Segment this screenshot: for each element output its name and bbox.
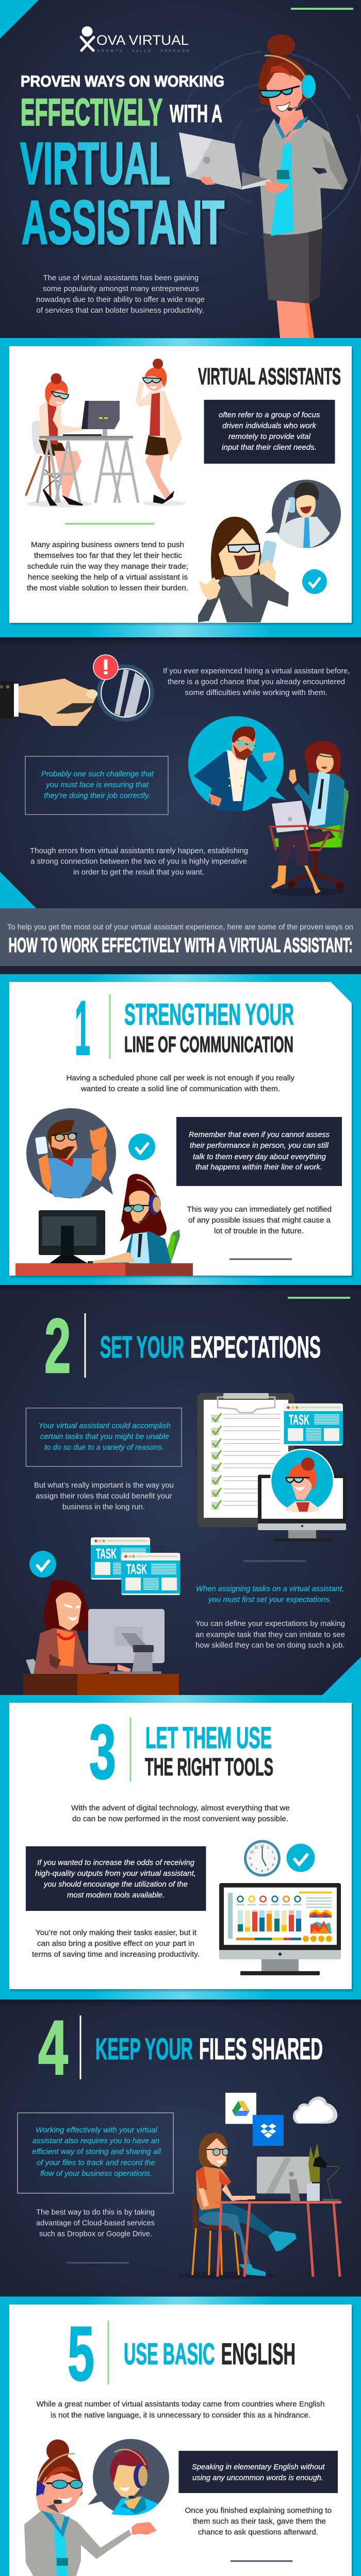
text: roles: assign their roles that could benefit your <box>36 1492 172 1500</box>
divider <box>229 1258 292 1260</box>
section shadow <box>0 1999 361 2006</box>
step number 5: 5 <box>68 2310 94 2397</box>
accent line <box>291 8 353 10</box>
text: business owners: schedule ruin the way they manage their trade; <box>27 562 188 571</box>
panel: virtual assistants section band <box>0 338 361 637</box>
callout: definition: often refer to a group of focus <box>219 411 320 419</box>
icon: clock: 6 <box>261 1870 264 1873</box>
text: errors <box>30 846 248 877</box>
title: PROVEN WAYS ON WORKING <box>21 72 224 90</box>
divider <box>67 2262 129 2264</box>
panel: step 1 band <box>0 974 361 1285</box>
illustration: assistant at computer <box>23 1580 179 1695</box>
illustration: hand with magnifier <box>0 655 154 726</box>
text: define expectations: You can define your expectations by making <box>195 1619 345 1628</box>
icon: check <box>29 1551 56 1578</box>
callout: modern tools: If you wanted to increase the odds of receiving <box>37 1858 195 1867</box>
callout: sharing: of your files to track and record the <box>37 2159 155 2167</box>
callout: remember: talk to them every day about everything <box>193 1153 326 1161</box>
icon: clock: 5 <box>267 1868 269 1872</box>
text: define expectations <box>195 1619 345 1650</box>
panel: step 1 card <box>9 982 352 1276</box>
illustration: worried woman at laptop <box>269 741 349 896</box>
panel: step 3 band <box>0 1695 361 1999</box>
text: hiring difficulties: some difficulties while working with them. <box>185 688 327 697</box>
text: define expectations: an example task that they can imitate to see <box>195 1630 345 1639</box>
callout: modern tools: most modern tools available. <box>67 1891 165 1900</box>
text: cloud services: advantage of Cloud-based services <box>36 2219 155 2228</box>
callout: tasks: to do so due to a variety of reasons. <box>44 1443 164 1452</box>
illustration: man speech bubble <box>188 716 286 811</box>
panel: difficulties background <box>0 637 361 974</box>
icon: clock: 10 <box>250 1851 254 1854</box>
panel: hero background <box>0 0 361 338</box>
text: questions <box>185 2506 332 2537</box>
icon: dropbox card <box>253 2115 284 2146</box>
icon: check <box>128 1133 155 1160</box>
callout: definition: remotely to provide vital <box>228 432 311 441</box>
callout: definition: input that their client needs. <box>222 443 317 452</box>
heading: step 2: SET YOUR <box>100 1330 184 1364</box>
divider <box>130 1718 131 1782</box>
text: phone call: wanted to create a solid line of communication with them. <box>80 1084 280 1093</box>
callout: challenge: you must face is ensuring that <box>45 781 149 789</box>
panel glow bottom <box>88 1276 273 1285</box>
text: hiring difficulties: there is a good chance that you already encountered <box>168 677 345 686</box>
text: digital technology <box>71 1804 290 1823</box>
text: roles: But what’s really important is the way you <box>34 1481 174 1490</box>
panel glow top <box>88 338 273 346</box>
text: notifications: of any possible issues that might cause a <box>188 1216 331 1225</box>
callout: elementary english: Speaking in elementary English without <box>192 2463 325 2471</box>
text: phone call <box>67 1074 294 1093</box>
rings behind character <box>176 52 361 237</box>
illustration: two assistants and desk <box>26 359 186 507</box>
title: VIRTUAL <box>20 131 170 197</box>
illustration: task cards: TASK <box>126 1561 147 1577</box>
icon: clock: 12 <box>260 1844 264 1848</box>
illustration: task card: TASK <box>289 1412 309 1428</box>
panel: white card <box>9 346 352 623</box>
text: native language: is not the native language, it is unnecessary to consider this as a hindrance. <box>51 2411 310 2419</box>
text: errors: in order to get the result that you want. <box>73 868 204 877</box>
callout: sharing: assistant also requires you to have an <box>32 2137 159 2145</box>
illustration: man on phone bubble <box>265 480 341 548</box>
text: cloud services <box>36 2208 155 2239</box>
illustration: woman on phone <box>198 517 289 622</box>
panel glow top <box>88 1695 273 1703</box>
corner triangle <box>0 0 39 39</box>
icon: check <box>287 1843 315 1872</box>
icon: clock: 9 <box>249 1857 251 1861</box>
text: positive effect: You’re not only making their tasks easier, but it <box>36 1928 197 1937</box>
callout: sharing: efficient way of storing and sharing all <box>32 2147 161 2156</box>
divider <box>231 2561 293 2562</box>
band shadow <box>0 966 361 974</box>
callout: tasks: Your virtual assistant could accomplish <box>38 1421 171 1430</box>
icon: clock: 11 <box>254 1846 258 1850</box>
illustration: woman at desk with computer <box>177 2133 341 2279</box>
callout: challenge: they’re doing their job correctly. <box>44 791 151 800</box>
panel glow top <box>88 2297 273 2304</box>
illustration: task cards <box>91 1537 180 1595</box>
section shadow <box>0 637 361 646</box>
icon: clock: 4 <box>272 1863 274 1867</box>
panel: step 4 background <box>0 1999 361 2297</box>
divider <box>85 1313 86 1378</box>
icon: google drive card <box>225 2093 256 2124</box>
title: EFFECTIVELY <box>21 92 162 133</box>
logo: OVA Virtual <box>81 26 189 53</box>
title <box>20 72 224 257</box>
text: business owners <box>27 540 188 592</box>
text: cloud services: such as Dropbox or Google Drive. <box>39 2230 152 2239</box>
text: roles <box>34 1481 174 1512</box>
callout: sharing: Working effectively with your virtual <box>36 2126 158 2134</box>
icon: clock: 8 <box>251 1863 253 1867</box>
text: cloud services: The best way to do this is by taking <box>36 2208 155 2217</box>
illustration: headset person bubble <box>88 2439 169 2515</box>
callout: sharing <box>18 2113 173 2193</box>
intro text: The use of virtual assistants has been gaining <box>43 274 199 282</box>
step number 3: 3 <box>89 1708 116 1795</box>
icon: clock: 7 <box>255 1868 257 1872</box>
text: notifications <box>187 1205 332 1235</box>
icon: cloud <box>293 2096 337 2124</box>
text: questions: chance to ask questions afterward. <box>198 2528 318 2537</box>
heading: step 1 <box>124 998 294 1057</box>
text: hiring difficulties: If you ever experienced hiring a virtual assistant before, <box>163 667 350 675</box>
illustration: analytics monitor <box>219 1883 341 1975</box>
divider <box>107 2320 109 2384</box>
callout: remember: their performance in person, you can still <box>190 1141 329 1150</box>
text: questions: them such as their task, gave them the <box>193 2517 326 2526</box>
text: 1 <box>75 985 90 1071</box>
heading: step 5: USE BASIC <box>124 2337 215 2371</box>
heading: how to work effectively <box>7 923 353 957</box>
icon: check <box>302 569 327 594</box>
intro text: some popularity amongst many entrepreneurs <box>43 284 199 293</box>
text: notifications: This way you can immediately get notified <box>187 1205 332 1214</box>
heading: step 5: ENGLISH <box>221 2337 296 2371</box>
callout: remember: that happens within their line of work. <box>195 1163 322 1172</box>
text: business owners: Many aspiring business owners tend to push <box>31 540 184 549</box>
intro text <box>36 274 205 315</box>
text: business owners: themselves too far that they let their hectic <box>34 551 182 560</box>
accent line <box>65 523 154 524</box>
text: digital technology: With the advent of digital technology, almost everything that we <box>71 1804 290 1812</box>
corner triangle <box>322 1657 361 1695</box>
text: native language <box>36 2400 325 2419</box>
panel: step 3 card <box>9 1703 352 1989</box>
panel: step 2 background <box>0 1285 361 1695</box>
icon: clock: 3 <box>273 1857 275 1861</box>
intro text: of services that can bolster business productivity. <box>36 306 204 315</box>
illustration: assistant at monitor <box>15 1174 193 1276</box>
icon: clock: 2 <box>272 1851 274 1854</box>
heading: step 4: KEEP YOUR <box>95 2032 193 2066</box>
intro text: nowadays due to their ability to offer a wide range <box>36 295 205 304</box>
text: business owners: hence seeking the help of a virtual assistant is <box>28 573 188 582</box>
divider <box>243 1560 306 1562</box>
text: positive effect: can also bring a positive effect on your part in <box>37 1939 194 1948</box>
callout: tasks: certain tasks that you might be unable <box>40 1432 169 1441</box>
panel: step 5 card <box>9 2304 352 2576</box>
logo: OVA Virtual: OVA VIRTUAL <box>96 32 189 48</box>
title: WITH A <box>170 100 222 128</box>
illustration: monitor with assistant portrait <box>258 1449 346 1541</box>
panel glow bottom <box>88 623 273 637</box>
callout: modern tools: high-quality outputs from your virtual assistant, <box>35 1869 196 1878</box>
illustration: assistant pointing <box>24 2439 157 2576</box>
callout: challenge: Probably one such challenge that <box>41 770 154 778</box>
divider <box>79 2015 81 2079</box>
heading: how to work effectively: To help you get the most out of your virtual assistant experience, here are some of the proven ways on <box>7 923 353 931</box>
text: errors: Though errors from virtual assistants rarely happen, establishing <box>30 846 248 855</box>
title: ASSISTANT <box>22 188 224 257</box>
callout: definition <box>204 400 335 464</box>
text: native language: While a great number of virtual assistants today came from countries where English <box>36 2400 325 2409</box>
callout: elementary english: using any uncommon words is enough. <box>192 2473 323 2482</box>
callout text: expectations <box>196 1585 344 1604</box>
corner triangle <box>0 872 36 908</box>
text: errors: a strong connection between the two of you is highly imperative <box>30 857 247 866</box>
divider <box>109 994 110 1059</box>
callout: definition: driven individuals who work <box>222 421 317 430</box>
illustration: man bubble <box>26 1108 116 1198</box>
callout: challenge <box>25 756 168 815</box>
callout text: expectations: you must first set your expectations. <box>208 1596 332 1604</box>
text: roles: business in the long run. <box>62 1502 145 1512</box>
callout: modern tools <box>26 1846 206 1911</box>
step number 4: 4 <box>38 2004 68 2091</box>
section shadow <box>0 1285 361 1291</box>
panel glow bottom <box>88 1989 273 1999</box>
panel: how-to band <box>0 908 361 966</box>
panel glow top <box>88 974 273 982</box>
text: digital technology: do can be now performed in the most convenient way possible. <box>72 1815 288 1823</box>
text: notifications: lot of trouble in the future. <box>214 1227 304 1235</box>
illustration: task card <box>284 1403 343 1446</box>
text: questions: Once you finished explaining something to <box>185 2506 332 2515</box>
callout: tasks <box>26 1408 182 1466</box>
callout: remember: Remember that even if you cannot assess <box>189 1130 330 1139</box>
text: positive effect: terms of saving time and increasing productivity. <box>32 1950 200 1959</box>
illustration: task cards: TASK <box>96 1546 117 1562</box>
text: hiring difficulties <box>163 667 350 697</box>
text: business owners: the most viable solution to lessen their burden. <box>27 584 188 592</box>
text: define expectations: how skilled they can be on doing such a job. <box>195 1641 344 1650</box>
icon: clock: 1 <box>267 1846 269 1850</box>
illustration: assistant with laptop <box>179 35 348 338</box>
illustration: clipboard <box>198 1393 294 1527</box>
callout: modern tools: you should encourage the utilization of the <box>43 1880 188 1889</box>
step number 2: 2 <box>44 1302 71 1389</box>
callout: remember <box>176 1117 342 1186</box>
heading: step 3 <box>145 1721 273 1781</box>
text: positive effect <box>32 1928 200 1959</box>
accent line <box>288 1297 350 1299</box>
heading: step 3: LET THEM USE <box>145 1721 272 1755</box>
callout: sharing: flow of your business operations. <box>40 2170 152 2178</box>
callout text: expectations: When assigning tasks on a virtual assistant, <box>196 1585 344 1594</box>
callout: elementary english <box>178 2451 338 2493</box>
logo: OVA Virtual: GROWTH . VALUE . FREEDOM <box>97 49 189 53</box>
panel: step 5 band <box>0 2297 361 2576</box>
text: phone call: Having a scheduled phone call per week is not enough if you really <box>67 1074 294 1082</box>
icon: clock <box>244 1840 281 1876</box>
